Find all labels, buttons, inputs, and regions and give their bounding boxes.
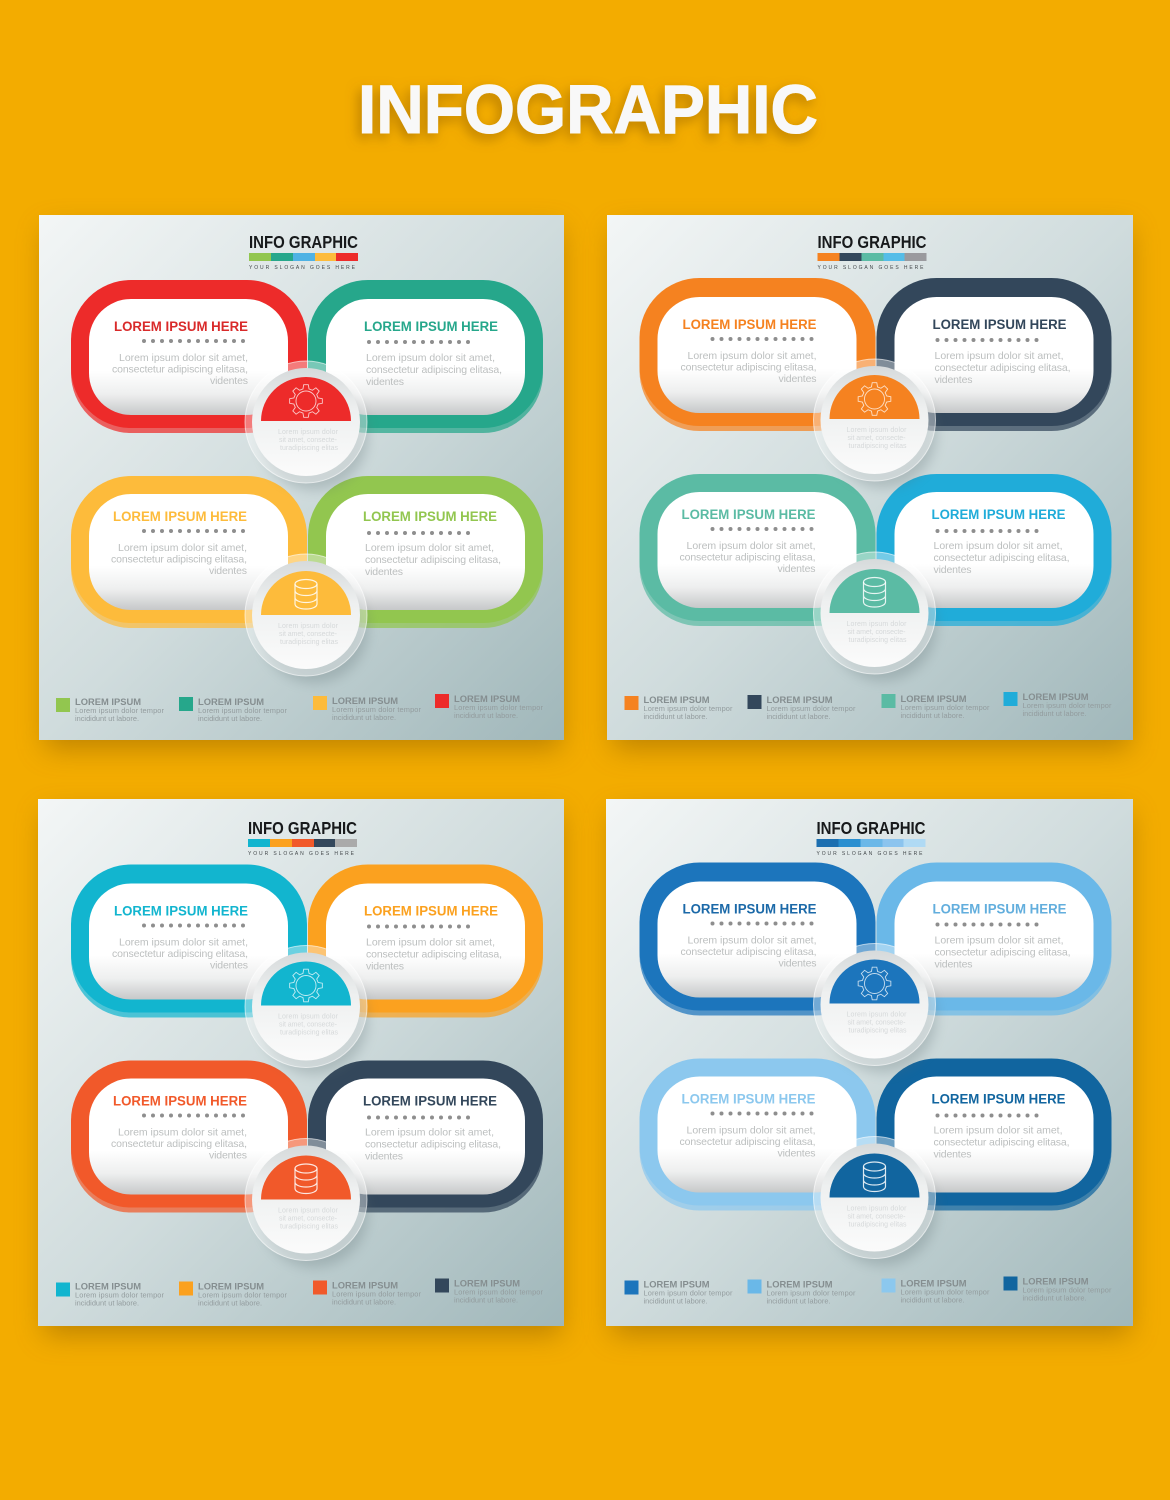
legend: incididunt ut labore. xyxy=(198,1298,262,1308)
card: cyan: LOREM IPSUM HERE xyxy=(114,904,248,918)
card: cyan: videntes xyxy=(210,960,248,972)
badge: database: Lorem ipsum dolor xyxy=(278,623,339,630)
badge: database: Lorem ipsum dolor xyxy=(846,1206,907,1212)
card: navy xyxy=(876,278,1112,431)
badge: database xyxy=(814,552,936,681)
panel heading: INFO GRAPHIC xyxy=(816,818,926,838)
legend xyxy=(56,694,544,723)
badge: gear: Lorem ipsum dolor xyxy=(846,1012,907,1018)
legend: incididunt ut labore. xyxy=(1022,709,1086,718)
card: blue: videntes xyxy=(934,564,972,576)
panel heading: INFO GRAPHIC xyxy=(248,818,357,838)
card: pale blue: LOREM IPSUM HERE xyxy=(682,1092,816,1106)
legend: Lorem ipsum dolor tempor xyxy=(900,703,990,712)
legend: incididunt ut labore. xyxy=(75,1298,139,1308)
panel heading: YOUR SLOGAN GOES HERE xyxy=(816,851,923,857)
legend: incididunt ut labore. xyxy=(198,714,262,723)
card: lime: LOREM IPSUM HERE xyxy=(363,509,497,524)
legend: Lorem ipsum dolor tempor xyxy=(332,1290,422,1298)
card: green: LOREM IPSUM HERE xyxy=(364,319,498,334)
legend: incididunt ut labore. xyxy=(332,713,396,722)
card: blue: LOREM IPSUM HERE xyxy=(682,902,816,916)
card: cyan: consectetur adipiscing elitasa, xyxy=(112,948,248,960)
card: dark blue xyxy=(876,1058,1112,1210)
card: dark blue: LOREM IPSUM HERE xyxy=(932,1092,1066,1106)
card: navy xyxy=(308,1060,543,1212)
card: pale blue: videntes xyxy=(778,1148,816,1160)
card: navy: videntes xyxy=(365,1150,403,1162)
card: green: consectetur adipiscing elitasa, xyxy=(366,364,502,376)
title: INFOGRAPHIC xyxy=(358,71,818,148)
card: lime: videntes xyxy=(365,566,403,578)
card: teal: Lorem ipsum dolor sit amet, xyxy=(686,540,816,552)
legend: LOREM IPSUM xyxy=(766,695,832,705)
legend: LOREM IPSUM xyxy=(900,694,966,704)
legend: incididunt ut labore. xyxy=(766,1296,830,1306)
badge: gear: turadipiscing elitas xyxy=(848,1028,907,1034)
card: light blue: LOREM IPSUM HERE xyxy=(932,902,1066,916)
badge: gear xyxy=(814,944,936,1072)
card: blue: videntes xyxy=(778,958,816,970)
legend: LOREM IPSUM xyxy=(332,1280,398,1290)
card: navy: videntes xyxy=(934,374,972,386)
badge: database: sit amet, consecte- xyxy=(279,1216,338,1222)
card: lime: consectetur adipiscing elitasa, xyxy=(365,554,501,566)
legend: LOREM IPSUM xyxy=(454,1278,520,1288)
badge: database: Lorem ipsum dolor xyxy=(278,1208,339,1214)
card: pale blue xyxy=(640,1058,876,1210)
badge: database: turadipiscing elitas xyxy=(280,1224,338,1230)
card: navy: consectetur adipiscing elitasa, xyxy=(365,1138,501,1150)
legend: Lorem ipsum dolor tempor xyxy=(198,1290,288,1300)
panel heading: YOUR SLOGAN GOES HERE xyxy=(249,265,356,271)
card: cyan xyxy=(71,864,307,1018)
legend: incididunt ut labore. xyxy=(644,1296,708,1306)
legend: Lorem ipsum dolor tempor xyxy=(332,705,422,714)
card: orange: videntes xyxy=(366,960,404,972)
badge: database xyxy=(245,554,368,683)
legend: Lorem ipsum dolor tempor xyxy=(644,704,733,713)
legend xyxy=(624,692,1112,721)
card: light blue: consectetur adipiscing elitasa, xyxy=(934,946,1070,958)
card: orange: consectetur adipiscing elitasa, xyxy=(680,362,816,374)
legend: LOREM IPSUM xyxy=(198,697,264,707)
card: pale blue: consectetur adipiscing elitasa, xyxy=(680,1136,816,1148)
card: orange: LOREM IPSUM HERE xyxy=(682,317,816,332)
card: navy: Lorem ipsum dolor sit amet, xyxy=(934,350,1064,362)
badge: gear: turadipiscing elitas xyxy=(280,445,338,452)
panel heading: INFO GRAPHIC xyxy=(249,232,358,252)
card: orange: Lorem ipsum dolor sit amet, xyxy=(366,936,495,948)
panel: cyan orange red navy xyxy=(38,799,564,1335)
legend: LOREM IPSUM xyxy=(644,1280,710,1290)
legend: Lorem ipsum dolor tempor xyxy=(75,1290,165,1300)
card: teal: LOREM IPSUM HERE xyxy=(682,507,816,522)
legend: incididunt ut labore. xyxy=(454,1296,518,1304)
card: navy: LOREM IPSUM HERE xyxy=(932,317,1066,332)
legend: incididunt ut labore. xyxy=(75,714,139,723)
badge: gear: sit amet, consecte- xyxy=(848,1020,906,1026)
legend: incididunt ut labore. xyxy=(766,712,830,721)
card: green: videntes xyxy=(366,376,404,388)
badge: database: sit amet, consecte- xyxy=(279,631,338,638)
card: red-orange: consectetur adipiscing elitasa, xyxy=(111,1138,247,1150)
card: teal: videntes xyxy=(778,563,816,575)
panel: blues xyxy=(606,799,1133,1335)
badge: gear: sit amet, consecte- xyxy=(279,1022,338,1028)
legend: incididunt ut labore. xyxy=(332,1298,396,1306)
card: blue: consectetur adipiscing elitasa, xyxy=(934,552,1070,564)
card: orange: consectetur adipiscing elitasa, xyxy=(366,948,502,960)
card: cyan: Lorem ipsum dolor sit amet, xyxy=(119,936,248,948)
card: yellow xyxy=(71,476,307,628)
badge: database xyxy=(814,1136,936,1266)
card: red-orange: videntes xyxy=(209,1150,247,1162)
card: lime xyxy=(308,476,543,628)
card: blue: consectetur adipiscing elitasa, xyxy=(680,946,816,958)
legend: LOREM IPSUM xyxy=(198,1282,264,1292)
badge: database xyxy=(245,1138,368,1268)
badge: database: sit amet, consecte- xyxy=(848,629,906,636)
panel heading xyxy=(816,818,926,857)
badge: gear: turadipiscing elitas xyxy=(848,443,907,450)
badge: gear xyxy=(245,361,368,490)
card: orange: videntes xyxy=(778,373,816,385)
panel heading xyxy=(248,818,357,857)
legend: Lorem ipsum dolor tempor xyxy=(766,1288,856,1298)
legend: Lorem ipsum dolor tempor xyxy=(454,1288,544,1296)
panel heading: YOUR SLOGAN GOES HERE xyxy=(818,265,924,271)
card: lime: Lorem ipsum dolor sit amet, xyxy=(365,542,494,554)
panel heading xyxy=(818,232,927,271)
card: dark blue: videntes xyxy=(934,1148,972,1160)
badge: gear: Lorem ipsum dolor xyxy=(846,427,907,434)
legend: LOREM IPSUM xyxy=(1022,692,1088,702)
card: yellow: consectetur adipiscing elitasa, xyxy=(111,554,247,566)
legend: LOREM IPSUM xyxy=(75,1282,141,1292)
card: red xyxy=(71,280,307,433)
card: red-orange xyxy=(71,1060,307,1212)
card: blue xyxy=(640,862,876,1016)
legend: incididunt ut labore. xyxy=(454,711,518,720)
badge: gear: turadipiscing elitas xyxy=(280,1030,338,1036)
card: orange xyxy=(640,278,876,431)
legend: LOREM IPSUM xyxy=(75,697,141,707)
legend: incididunt ut labore. xyxy=(644,712,708,721)
card: yellow: LOREM IPSUM HERE xyxy=(113,509,247,524)
badge: gear: sit amet, consecte- xyxy=(279,437,338,444)
card: teal xyxy=(640,474,876,626)
badge: gear xyxy=(814,359,936,488)
card: red-orange: Lorem ipsum dolor sit amet, xyxy=(118,1126,247,1138)
card: light blue xyxy=(876,862,1112,1016)
legend: Lorem ipsum dolor tempor xyxy=(1022,701,1112,710)
legend: LOREM IPSUM xyxy=(766,1280,832,1290)
card: blue: LOREM IPSUM HERE xyxy=(932,507,1066,522)
card: orange: Lorem ipsum dolor sit amet, xyxy=(688,350,816,362)
legend: incididunt ut labore. xyxy=(900,711,964,720)
legend xyxy=(56,1278,544,1308)
card: pale blue: Lorem ipsum dolor sit amet, xyxy=(686,1124,816,1136)
legend: LOREM IPSUM xyxy=(1022,1276,1088,1286)
card: blue: Lorem ipsum dolor sit amet, xyxy=(688,934,816,946)
legend xyxy=(624,1276,1112,1306)
legend: Lorem ipsum dolor tempor xyxy=(75,706,165,715)
card: red: Lorem ipsum dolor sit amet, xyxy=(119,352,248,364)
legend: Lorem ipsum dolor tempor xyxy=(198,706,288,715)
card: green xyxy=(308,280,543,433)
badge: gear xyxy=(245,946,368,1074)
card: light blue: Lorem ipsum dolor sit amet, xyxy=(934,934,1064,946)
badge: database: turadipiscing elitas xyxy=(280,639,338,646)
card: orange: LOREM IPSUM HERE xyxy=(364,904,498,918)
card: yellow: videntes xyxy=(209,565,247,577)
panel: orange navy teal blue xyxy=(607,215,1133,749)
card: green: Lorem ipsum dolor sit amet, xyxy=(366,352,495,364)
legend: Lorem ipsum dolor tempor xyxy=(454,703,544,712)
card: red: LOREM IPSUM HERE xyxy=(114,319,248,334)
card: blue xyxy=(876,474,1112,626)
card: red-orange: LOREM IPSUM HERE xyxy=(113,1094,247,1108)
badge: gear: sit amet, consecte- xyxy=(848,435,906,442)
legend: Lorem ipsum dolor tempor xyxy=(644,1288,733,1298)
card: navy: Lorem ipsum dolor sit amet, xyxy=(365,1126,494,1138)
legend: LOREM IPSUM xyxy=(454,694,520,704)
card: dark blue: consectetur adipiscing elitasa, xyxy=(934,1136,1070,1148)
card: orange xyxy=(308,864,543,1018)
card: dark blue: Lorem ipsum dolor sit amet, xyxy=(934,1124,1062,1136)
panel: red green yellow lime xyxy=(39,215,564,749)
legend: LOREM IPSUM xyxy=(900,1278,966,1288)
card: navy: consectetur adipiscing elitasa, xyxy=(934,362,1070,374)
legend: incididunt ut labore. xyxy=(900,1296,964,1304)
badge: database: turadipiscing elitas xyxy=(848,637,907,644)
panel heading: YOUR SLOGAN GOES HERE xyxy=(248,851,355,857)
badge: database: Lorem ipsum dolor xyxy=(846,621,907,628)
card: teal: consectetur adipiscing elitasa, xyxy=(680,552,816,564)
legend: Lorem ipsum dolor tempor xyxy=(900,1288,990,1296)
legend: Lorem ipsum dolor tempor xyxy=(1022,1286,1112,1294)
card: navy: LOREM IPSUM HERE xyxy=(363,1094,497,1108)
card: red: videntes xyxy=(210,375,248,387)
card: light blue: videntes xyxy=(934,958,972,970)
badge: gear: Lorem ipsum dolor xyxy=(278,429,339,436)
badge: database: sit amet, consecte- xyxy=(848,1214,906,1220)
legend: Lorem ipsum dolor tempor xyxy=(766,704,856,713)
card: yellow: Lorem ipsum dolor sit amet, xyxy=(118,542,247,554)
badge: gear: Lorem ipsum dolor xyxy=(278,1014,339,1020)
badge: database: turadipiscing elitas xyxy=(848,1222,907,1228)
card: blue: Lorem ipsum dolor sit amet, xyxy=(934,540,1062,552)
card: red: consectetur adipiscing elitasa, xyxy=(112,364,248,376)
legend: incididunt ut labore. xyxy=(1022,1294,1086,1302)
panel heading xyxy=(249,232,358,271)
panel heading: INFO GRAPHIC xyxy=(818,232,927,252)
legend: LOREM IPSUM xyxy=(644,695,710,705)
legend: LOREM IPSUM xyxy=(332,696,398,706)
